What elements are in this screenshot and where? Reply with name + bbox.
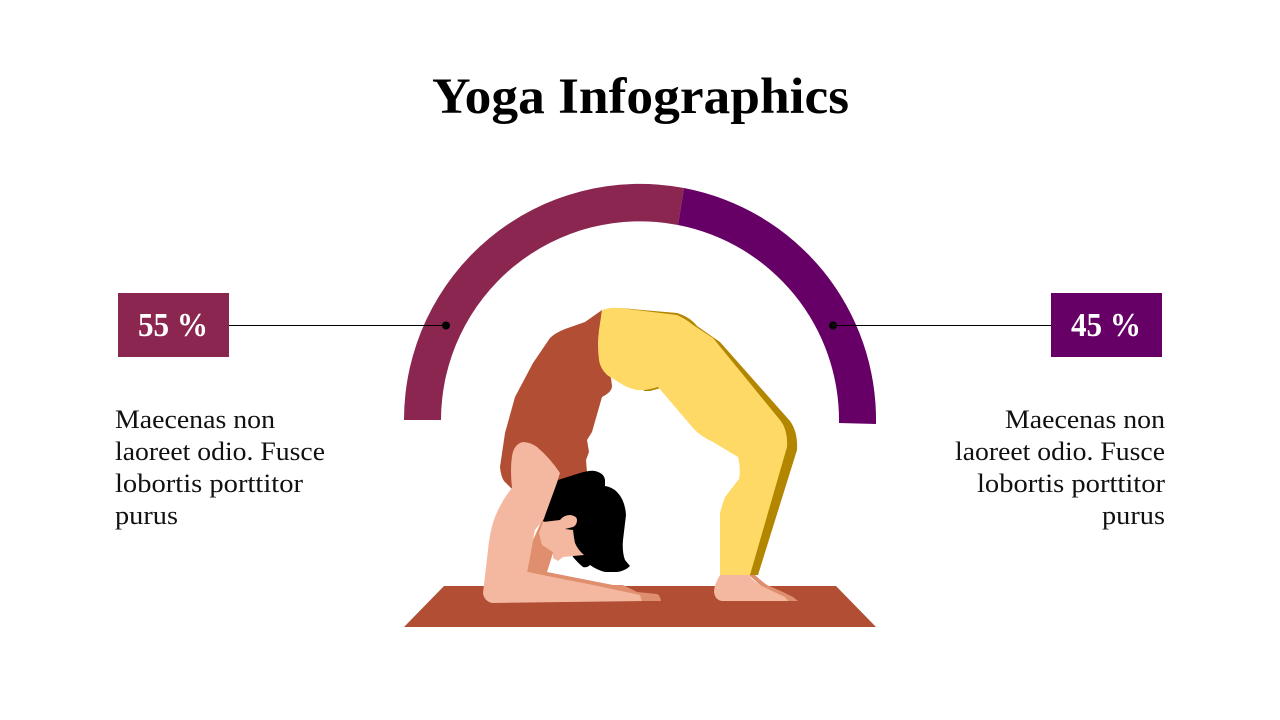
text block: right: laoreet odio. Fusce [955, 437, 1165, 466]
text block: left: purus [115, 501, 178, 530]
badge: 45 percent [1051, 293, 1162, 357]
leg shadow [620, 308, 797, 575]
title: Yoga Infographics [432, 69, 849, 125]
gauge segment: 55 percent [404, 184, 684, 420]
hair [543, 471, 630, 572]
badge: 55 percent [118, 293, 229, 357]
yoga figure [483, 308, 798, 603]
hip shadow [643, 384, 661, 391]
yoga mat [404, 586, 876, 627]
foot [714, 575, 788, 601]
face and hand [539, 515, 584, 561]
text block: left: Maecenas non [115, 405, 275, 434]
text block: left: lobortis porttitor [115, 469, 303, 498]
foot shadow [749, 575, 798, 601]
text block: right: lobortis porttitor [977, 469, 1165, 498]
gauge segment: 45 percent [678, 188, 876, 424]
badge: 45 percent: 45 % [1071, 307, 1141, 344]
badge: 55 percent: 55 % [138, 307, 208, 344]
text block: left: laoreet odio. Fusce [115, 437, 325, 466]
semicircle gauge [404, 184, 876, 424]
shirt [500, 310, 612, 490]
arm shadow [527, 518, 661, 601]
text block: right: purus [1102, 501, 1165, 530]
connector: right [829, 322, 1051, 330]
connector: left [229, 322, 450, 330]
arm [483, 442, 642, 603]
text block: left [115, 405, 325, 530]
text block: right: Maecenas non [1005, 405, 1165, 434]
text block: right [955, 405, 1165, 530]
yellow leggings [598, 308, 787, 575]
